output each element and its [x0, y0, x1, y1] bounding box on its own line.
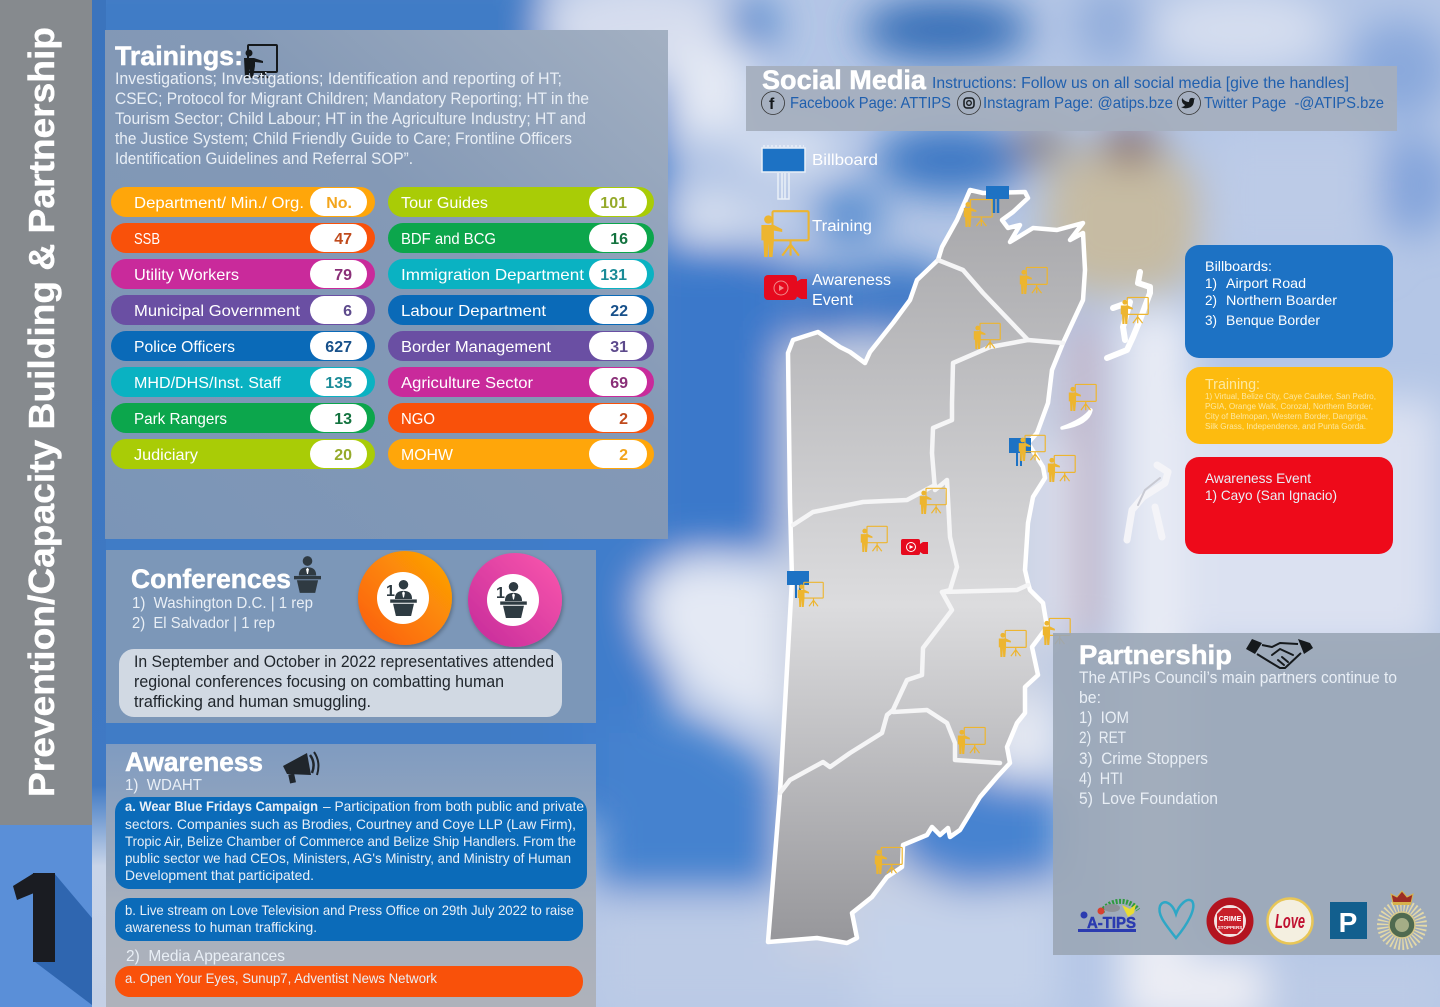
marker: PGIA training	[1048, 455, 1075, 482]
conference list: 1) Washington D.C. | 1 rep	[132, 595, 313, 612]
district borders	[780, 260, 1063, 793]
icon: twitter	[1178, 92, 1200, 114]
marker: airport road billboard	[1009, 438, 1031, 466]
number 1	[13, 873, 55, 962]
partners list: 4) HTI	[1079, 770, 1123, 788]
callout: billboards: 1)	[1205, 275, 1217, 291]
pill: MOHW: 2	[619, 447, 628, 464]
legend	[761, 146, 891, 309]
pill: NGO: 2	[619, 411, 628, 428]
logo: Love Foundation: Love	[1275, 911, 1305, 933]
callout: live stream: awareness to human trafficking.	[125, 919, 317, 935]
pill: immigration: 131	[600, 267, 627, 284]
callout: live stream: b. Live stream on Love Television and Press Office on 29th July 2022 to raise	[125, 902, 574, 918]
pill: tour guides: 101	[600, 195, 627, 212]
conference list: 2) El Salvador | 1 rep	[132, 615, 275, 632]
pill: labour: 22	[610, 303, 628, 320]
badge: El Salvador rep: 1	[496, 585, 505, 602]
pill: border management: 31	[610, 339, 628, 356]
pill: park rangers	[111, 403, 375, 433]
social instructions: Instructions: Follow us on all social media [give the handles]	[932, 75, 1349, 92]
marker: Western border training	[798, 582, 823, 607]
WDAHT label: 1) WDAHT	[125, 777, 202, 794]
marker: Belize City training	[1019, 435, 1045, 461]
callout: billboards: 3)	[1205, 312, 1217, 328]
callout: awareness event	[1185, 457, 1393, 554]
pill: MOHW	[388, 439, 654, 469]
callout: wear blue fridays: Development that participated.	[125, 867, 314, 883]
callout: media appearances: a. Open Your Eyes, Sunup7, Adventist News Network	[125, 970, 438, 986]
awareness heading: Awareness	[125, 747, 263, 777]
logo: press office: P	[1339, 907, 1357, 938]
callout: billboards: 2)	[1205, 292, 1217, 308]
pill: park rangers: Park Rangers	[134, 411, 227, 428]
callout: wear blue fridays: a. Wear Blue Fridays Campaign	[125, 798, 318, 814]
marker: Cayo training	[861, 526, 887, 552]
conference list	[132, 595, 313, 632]
panel: trainings	[105, 30, 668, 539]
legend label: awareness event: Event	[812, 292, 854, 309]
marker: Orange Walk training	[1020, 267, 1047, 294]
marker: Corozal training	[964, 200, 992, 227]
partners list	[1079, 669, 1397, 808]
trainings description	[115, 69, 589, 168]
callout: live stream	[115, 898, 583, 941]
pill: SSB: 47	[334, 231, 352, 248]
marker: Orange Walk west training	[974, 323, 1000, 349]
pill: BDF and BCG	[388, 223, 654, 253]
pill: BDF and BCG: BDF and BCG	[401, 231, 496, 248]
pill: MHD/DHS	[111, 367, 375, 397]
callout: billboards: Benque Border	[1226, 312, 1320, 328]
pill: NGO: NGO	[401, 411, 435, 428]
conference summary callout: trafficking and human smuggling.	[134, 692, 371, 711]
conference summary callout: regional conferences focusing on combatting human	[134, 672, 504, 691]
logo: A-TIPS	[1078, 901, 1138, 932]
icon: facebook	[762, 92, 784, 114]
pill: police officers	[111, 331, 375, 361]
icon: facebook: f	[769, 96, 775, 113]
pill: immigration: Immigration Department	[401, 267, 585, 284]
pill: department header: Department/ Min./ Org.	[134, 195, 304, 212]
pill: border management	[388, 331, 654, 361]
legend icon: billboard	[762, 146, 805, 199]
badge: Washington rep: 1	[386, 583, 395, 600]
pill: agriculture	[388, 367, 654, 397]
logo: Crime Stoppers	[1206, 898, 1254, 944]
callout: wear blue fridays: Tropic Air, Belize Chamber of Commerce and Belize Ship Handlers. From the	[125, 833, 576, 849]
pill: municipal government: 6	[343, 303, 352, 320]
trainings heading: Trainings:	[115, 41, 243, 71]
callout: training locations	[1186, 367, 1393, 444]
pill: utility workers: Utility Workers	[134, 267, 239, 284]
trainings description: Identification Guidelines and Referral SOP”.	[115, 149, 413, 168]
callout: awareness event: 1) Cayo (San Ignacio)	[1205, 487, 1337, 503]
callout: billboards	[1185, 245, 1393, 358]
pill: SSB: SSB	[134, 231, 160, 248]
partners list: 3) Crime Stoppers	[1079, 750, 1208, 768]
pill: park rangers: 13	[334, 411, 352, 428]
facebook handle: Facebook Page: ATTIPS	[790, 95, 951, 112]
pill: municipal government: Municipal Government	[134, 303, 301, 320]
country outline	[768, 190, 1085, 943]
badge: El Salvador rep	[468, 553, 562, 647]
panel: social media	[746, 65, 1397, 131]
pill: NGO	[388, 403, 654, 433]
pill: municipal government	[111, 295, 375, 325]
callout: billboards: Airport Road	[1226, 275, 1306, 291]
marker: awareness event video	[901, 539, 928, 555]
trainings description: Investigations; Investigations; Identification and reporting of HT;	[115, 69, 562, 88]
pill: BDF and BCG: 16	[610, 231, 628, 248]
pill: department header	[111, 187, 375, 217]
marker: Belmopan training	[920, 488, 946, 514]
callout: training locations: PGIA, Orange Walk, Corozal, Northern Border,	[1205, 402, 1373, 411]
pill: immigration	[388, 259, 654, 289]
pill: tour guides: Tour Guides	[401, 195, 488, 212]
logo: heart	[1159, 900, 1193, 938]
pill: utility workers: 79	[334, 267, 352, 284]
pill: judiciary	[111, 439, 375, 469]
pill: agriculture: Agriculture Sector	[401, 375, 534, 392]
pill: MOHW: MOHW	[401, 447, 454, 464]
pill: tour guides	[388, 187, 654, 217]
twitter handle: Twitter Page -@ATIPS.bze	[1204, 95, 1384, 112]
badge: Washington rep	[358, 551, 452, 645]
legend label: awareness event: Awareness	[812, 272, 891, 289]
logo: press office	[1330, 902, 1367, 939]
legend icon: training	[761, 211, 809, 257]
social media heading: Social Media	[762, 65, 927, 95]
instagram handle: Instagram Page: @atips.bze	[983, 95, 1173, 112]
pill: labour: Labour Department	[401, 303, 547, 320]
panel: partnership	[1053, 633, 1440, 955]
callout: training locations: Silk Grass, Independence, and Punta Gorda.	[1205, 422, 1366, 431]
callout: training locations: City of Belmopan, Western Border, Dangriga,	[1205, 412, 1368, 421]
partners list: 1) IOM	[1079, 709, 1129, 727]
conference summary callout: In September and October in 2022 representatives attended	[134, 652, 554, 671]
side title band	[0, 0, 92, 825]
pill: MHD/DHS: 135	[325, 375, 352, 392]
icon: trainer at board	[244, 45, 277, 78]
panel: conferences	[106, 550, 596, 723]
marker: Dangriga training	[999, 630, 1026, 657]
partnership heading: Partnership	[1079, 640, 1232, 670]
icon: instagram	[958, 92, 980, 114]
pill: judiciary: 20	[334, 447, 352, 464]
legend label: billboard: Billboard	[812, 152, 878, 169]
callout: billboards: Northern Boarder	[1226, 292, 1337, 308]
icon: speaker at podium	[294, 556, 321, 593]
pill: MHD/DHS: MHD/DHS/Inst. Staff	[134, 375, 282, 392]
panel: awareness	[106, 744, 596, 1007]
marker: northern billboard	[986, 186, 1009, 213]
island: Turneffe	[1127, 465, 1168, 540]
pill: labour	[388, 295, 654, 325]
logo: police badge	[1383, 891, 1421, 944]
partners list: The ATIPs Council’s main partners continue to	[1079, 669, 1397, 687]
partners list: 5) Love Foundation	[1079, 790, 1218, 808]
conferences heading: Conferences	[131, 564, 291, 594]
callout: wear blue fridays: public sector we had CEOs, Ministers, AG's Ministry, and Ministry of Human	[125, 850, 571, 866]
conference summary callout	[119, 649, 562, 717]
pill: SSB	[111, 223, 375, 253]
logo: Crime Stoppers: CRIME	[1219, 916, 1242, 923]
partners list: 2) RET	[1079, 729, 1126, 747]
island: Caye Caulker	[1062, 410, 1091, 428]
pill: judiciary: Judiciary	[134, 447, 198, 464]
callout: wear blue fridays: sectors. Companies such as Brodies, Courtney and Coye LLP (Law Firm),	[125, 816, 576, 832]
marker: Benque billboard	[787, 571, 809, 598]
callout: training locations: Training:	[1205, 376, 1260, 393]
trainings description: the Justice System; Child Friendly Guide to Care; Frontline Officers	[115, 129, 572, 148]
callout: media appearances	[115, 966, 583, 997]
legend label: training: Training	[812, 218, 872, 235]
legend icon: video	[764, 275, 807, 300]
legend label: awareness event	[812, 272, 891, 309]
callout: billboards: Billboards:	[1205, 258, 1272, 274]
side title text: Prevention/Capacity Building & Partnership	[21, 27, 62, 797]
trainings description: CSEC; Protocol for Migrant Children; Mandatory Reporting; HT in the	[115, 89, 589, 108]
callout: training locations: 1) Virtual, Belize City, Caye Caulker, San Pedro,	[1205, 392, 1376, 401]
pill: border management: Border Management	[401, 339, 552, 356]
pill: agriculture: 69	[610, 375, 628, 392]
icon: megaphone	[283, 752, 318, 784]
callout: awareness event: Awareness Event	[1205, 470, 1311, 486]
island: Ambergris Caye	[1107, 272, 1150, 358]
pill: police officers: 627	[325, 339, 352, 356]
section number block	[0, 825, 92, 1007]
map of Belize	[768, 186, 1168, 943]
marker: Dangriga coast training	[1043, 618, 1070, 645]
logo: Crime Stoppers: STOPPERS	[1218, 925, 1242, 930]
trainings description: Tourism Sector; Child Labour; HT in the Agriculture Industry; HT and	[115, 109, 586, 128]
logo: Love Foundation	[1268, 898, 1312, 944]
pill: police officers: Police Officers	[134, 339, 235, 356]
callout: wear blue fridays: – Participation from both public and private	[323, 798, 584, 814]
icon: handshake	[1246, 639, 1313, 668]
pill: utility workers	[111, 259, 375, 289]
logo: A-TIPS: A-TIPS	[1087, 915, 1136, 932]
marker: San Pedro training	[1121, 297, 1148, 324]
pill: department header: No.	[326, 195, 352, 212]
marker: Independence training	[958, 727, 985, 754]
media appearances label: 2) Media Appearances	[126, 948, 285, 965]
callout: wear blue fridays	[115, 797, 587, 889]
partners list: be:	[1079, 689, 1101, 707]
marker: Punta Gorda training	[875, 847, 902, 874]
marker: Caye Caulker training	[1069, 384, 1096, 411]
